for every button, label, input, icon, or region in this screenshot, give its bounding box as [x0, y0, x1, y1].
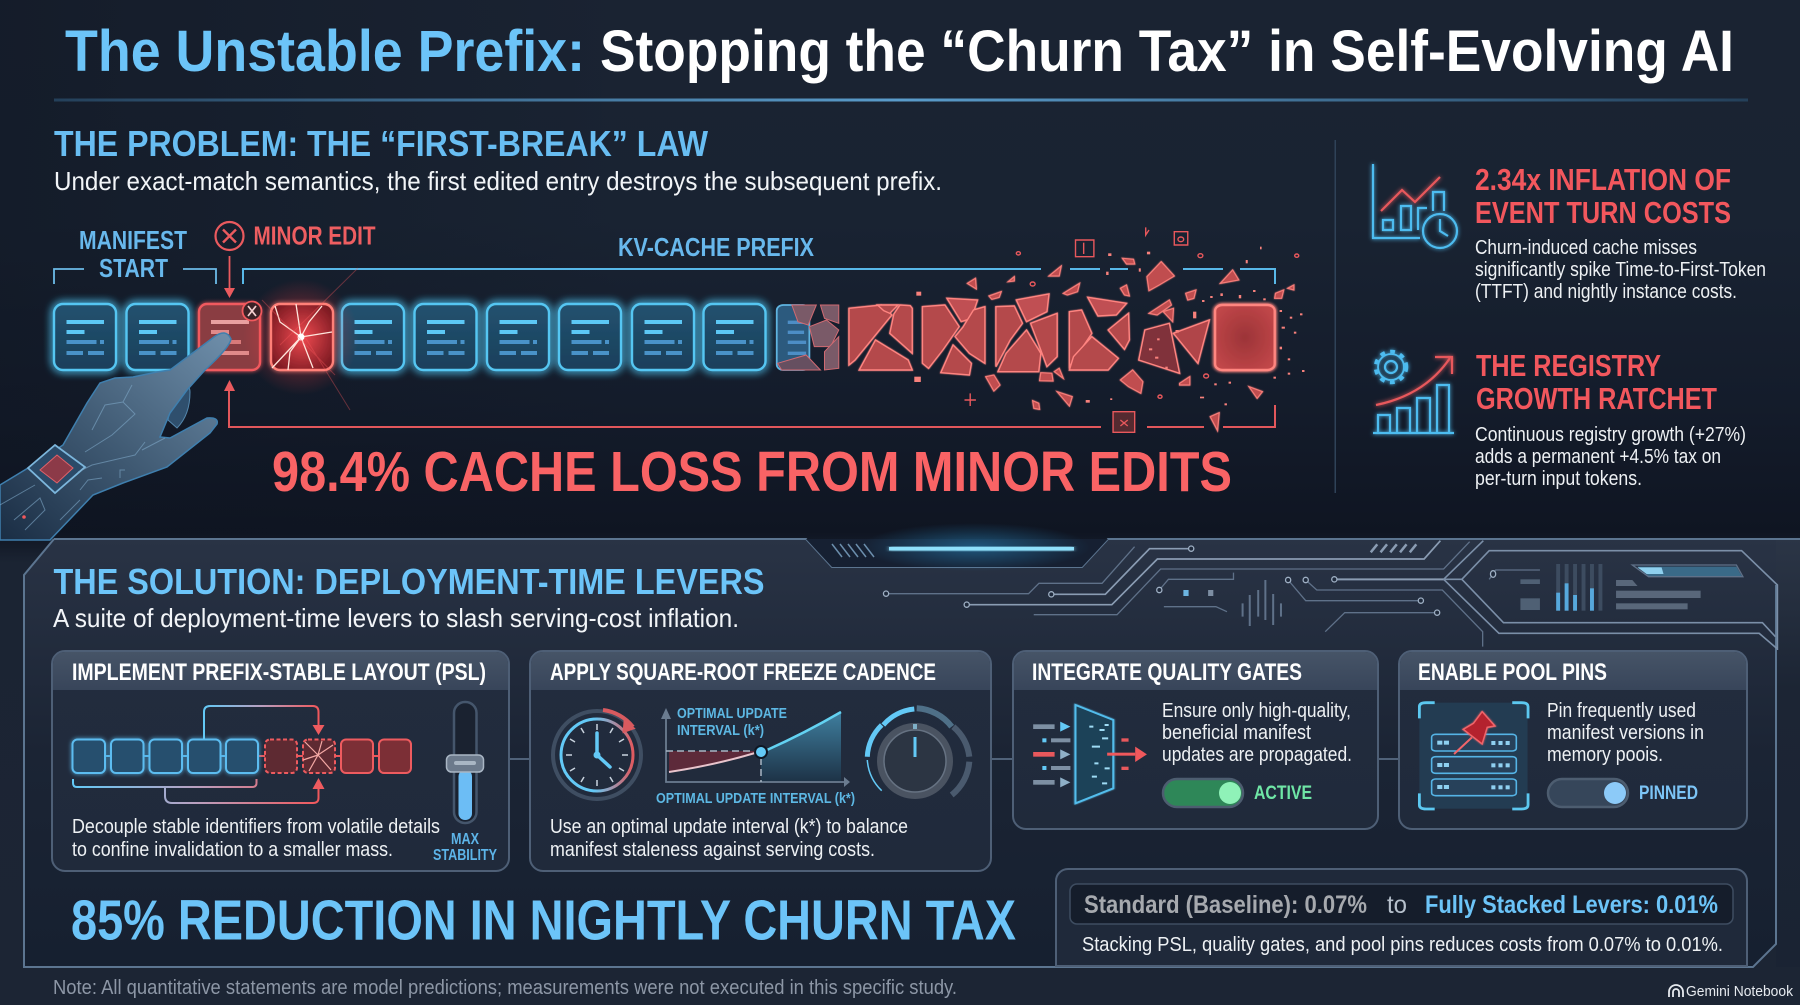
- red invalidation bracket: [224, 380, 1275, 427]
- intact blocks: [54, 304, 766, 370]
- card text: Decouple stable identifiers from volatile details: [72, 815, 440, 838]
- headline stat: churn tax reduction: 85% REDUCTION IN NIGHTLY CHURN TAX: [71, 888, 1016, 952]
- card connectors: [509, 758, 1399, 760]
- half broken block: [777, 305, 839, 370]
- card heading: ENABLE POOL PINS: [1418, 659, 1607, 686]
- top notch with glow bar: [806, 523, 1108, 571]
- cache block chain: [54, 268, 778, 410]
- toggle: pinned: [1548, 779, 1698, 807]
- comparison caption: Stacking PSL, quality gates, and pool pins reduces costs from 0.07% to 0.01%.: [1082, 933, 1723, 956]
- card text: Ensure only high-quality,: [1162, 699, 1351, 722]
- panel: prefix-stable layout: [52, 651, 509, 871]
- card heading: APPLY SQUARE-ROOT FREEZE CADENCE: [550, 659, 936, 686]
- panel: cost comparison: [1056, 869, 1747, 966]
- card text: updates are propagated.: [1162, 743, 1352, 766]
- chart: optimal update interval: OPTIMAL UPDATE INTERVAL (k*): [656, 791, 855, 807]
- panel: pool pins: [1399, 651, 1747, 829]
- stat: inflation: [1373, 162, 1766, 303]
- chart: optimal update interval: OPTIMAL UPDATE: [677, 706, 787, 722]
- small debris marks: [964, 227, 1299, 432]
- card text: Use an optimal update interval (k*) to balance: [550, 815, 908, 838]
- card heading: INTEGRATE QUALITY GATES: [1032, 659, 1302, 686]
- label: kv-cache prefix: [243, 232, 1275, 284]
- footnote: Note: All quantitative statements are model predictions; measurements were not executed in this specific study.: [53, 977, 957, 999]
- title: [65, 19, 1734, 84]
- edited red block: [199, 304, 260, 370]
- label: kv-cache prefix: KV-CACHE PREFIX: [618, 232, 815, 262]
- panel: quality gates: [1013, 651, 1378, 829]
- toggle: pinned: PINNED: [1639, 783, 1698, 804]
- cracked block burst: [243, 268, 359, 410]
- icon: chart with clock: [1373, 164, 1457, 248]
- hand pointing at edited block: [0, 333, 231, 540]
- connectors between blocks: [116, 336, 778, 338]
- label: manifest start: [54, 225, 216, 284]
- solution frame: [24, 523, 1800, 967]
- slider: max stability: MAX: [451, 831, 480, 848]
- card text: to confine invalidation to a smaller mass.: [72, 838, 393, 861]
- card heading: IMPLEMENT PREFIX-STABLE LAYOUT (PSL): [72, 659, 486, 686]
- stat body: adds a permanent +4.5% tax on: [1475, 445, 1721, 468]
- shard connectors: [839, 335, 1215, 338]
- problem subtitle: Under exact-match semantics, the first edited entry destroys the subsequent prefix.: [54, 166, 942, 196]
- sparks: [914, 247, 1304, 405]
- card text: manifest versions in: [1547, 721, 1704, 744]
- label: minor edit: [216, 220, 376, 298]
- stat heading: THE REGISTRY: [1476, 348, 1661, 383]
- circuit decoration: [883, 541, 1777, 650]
- title: The Unstable Prefix:: [65, 19, 585, 84]
- card text: [1547, 699, 1704, 766]
- stat body: Churn-induced cache misses: [1475, 236, 1697, 259]
- shattering blocks: [777, 227, 1304, 432]
- card text: manifest staleness against serving costs.: [550, 838, 875, 861]
- card text: [72, 815, 440, 861]
- close badge: [242, 302, 262, 320]
- stat: registry ratchet: GROWTH RATCHET: [1476, 381, 1717, 416]
- card text: beneficial manifest: [1162, 721, 1311, 744]
- heading: the problem: THE PROBLEM: THE “FIRST-BREAK” LAW: [54, 123, 708, 164]
- card text: memory poois.: [1547, 743, 1663, 766]
- stat: inflation: EVENT TURN COSTS: [1475, 195, 1731, 230]
- icon: dial: [867, 708, 969, 799]
- icon: pinned server: [1419, 703, 1528, 809]
- slider: max stability: STABILITY: [433, 847, 498, 864]
- panel: square-root freeze cadence: [530, 651, 991, 871]
- stat heading: 2.34x INFLATION OF: [1475, 162, 1731, 197]
- stat body: Continuous registry growth (+27%): [1475, 423, 1746, 446]
- label: manifest start: MANIFEST: [79, 225, 187, 255]
- broken red pieces: [849, 294, 1209, 375]
- stat body: [1475, 423, 1746, 490]
- solution subtitle: A suite of deployment-time levers to slash serving-cost inflation.: [53, 603, 739, 633]
- card text: [1162, 699, 1352, 766]
- chart: optimal update interval: [656, 706, 855, 807]
- heading: the solution: THE SOLUTION: DEPLOYMENT-TIME LEVERS: [54, 561, 764, 602]
- stacked figure: Fully Stacked Levers: 0.01%: [1425, 891, 1718, 919]
- diagram: psl chain: [72, 706, 411, 803]
- stat body: per-turn input tokens.: [1475, 467, 1642, 490]
- toggle: active: ACTIVE: [1254, 783, 1312, 804]
- card text: [550, 815, 908, 861]
- icon: clock: [553, 710, 641, 799]
- title: Stopping the “Churn Tax” in Self-Evolving AI: [600, 19, 1734, 84]
- headline stat: cache loss: 98.4% CACHE LOSS FROM MINOR EDITS: [272, 440, 1232, 504]
- final red block: [1215, 305, 1275, 370]
- baseline figure: Standard (Baseline): 0.07%: [1084, 891, 1367, 919]
- stat body: (TTFT) and nightly instance costs.: [1475, 280, 1737, 303]
- icon: filter gate: [1033, 705, 1147, 803]
- flying shards: [967, 258, 1294, 431]
- watermark: Gemini Notebook: [1686, 984, 1794, 1000]
- slider: max stability: [433, 702, 498, 864]
- stat body: [1475, 236, 1766, 303]
- chart: optimal update interval: INTERVAL (k*): [677, 723, 764, 739]
- icon: gear and growth bars: [1373, 352, 1454, 433]
- label: manifest start: START: [99, 253, 168, 283]
- toggle: active: [1163, 779, 1312, 807]
- to label: to: [1387, 891, 1407, 919]
- card text: Pin frequently used: [1547, 699, 1696, 722]
- divider: [1334, 140, 1336, 493]
- stat: registry ratchet: [1373, 348, 1746, 490]
- label: minor edit: MINOR EDIT: [254, 220, 376, 250]
